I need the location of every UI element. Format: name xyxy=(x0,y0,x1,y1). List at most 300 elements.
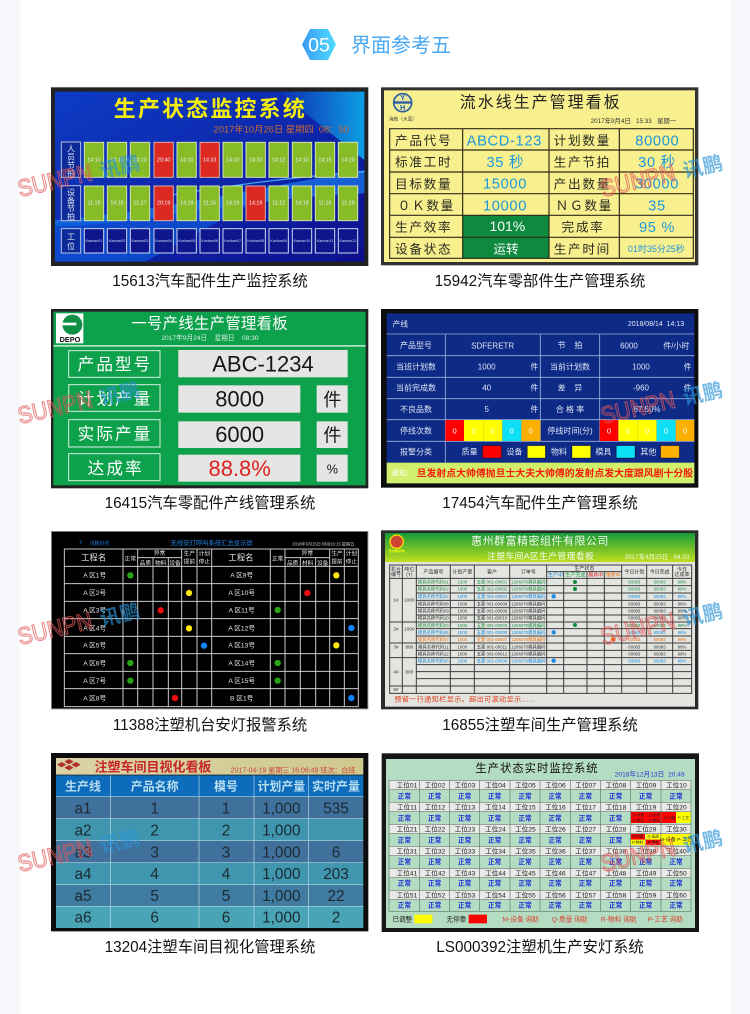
table headers: 正常 xyxy=(125,554,136,562)
table header: 今日计划 xyxy=(624,569,644,576)
table rows: 60083 xyxy=(628,630,641,635)
watermark: right column row 4: SUNPN xyxy=(598,833,678,877)
header xyxy=(78,537,354,547)
table text: 当前完成数 xyxy=(396,383,436,393)
panel: 16415 production line kanban: 6000 xyxy=(215,422,264,447)
table rows: 60083 xyxy=(628,623,641,628)
station states: 正常 xyxy=(428,857,442,866)
table rows: 98% xyxy=(678,630,686,635)
table text: 合 格 率 xyxy=(556,404,584,414)
table text: 1000 xyxy=(632,362,650,371)
panel: 13204 visual management board: 产品名称 xyxy=(131,779,179,794)
station states: 正常 xyxy=(579,900,592,909)
station names: 工位07 xyxy=(575,780,596,789)
station states: 正常 xyxy=(669,879,683,888)
panel: 15613 production monitoring screen: 14:10 xyxy=(180,158,193,164)
station names: 工位44 xyxy=(485,868,506,877)
station names: 工位34 xyxy=(485,846,506,855)
caption: 16415: 16415汽车零配件产线管理系统 xyxy=(105,495,315,512)
panel: 15613 production monitoring screen: 14:10 xyxy=(226,158,239,164)
table rows: 1000 xyxy=(458,601,468,606)
logo: SUNPN xyxy=(389,549,405,554)
panel: 15613 production monitoring screen: 拍 xyxy=(67,211,75,221)
station states: 正常 xyxy=(639,900,653,909)
table headers: 工程名 xyxy=(81,553,106,563)
station states: 正常 xyxy=(518,791,532,800)
station names: 工位13 xyxy=(455,802,476,811)
data table: 01时35分25秒 xyxy=(628,243,685,254)
date: 2018年12月13日 20:49 xyxy=(615,769,685,778)
logo xyxy=(389,535,405,554)
station states: 正常 xyxy=(428,879,442,888)
station states: 正常 xyxy=(398,813,411,822)
panel: 15613 production monitoring screen: Kanban11 xyxy=(317,239,333,243)
table rows: 1206070模具编码 xyxy=(511,622,546,629)
table rows: 60083 xyxy=(654,594,666,599)
station states: 正常 xyxy=(579,857,592,866)
data table: 生产时间 xyxy=(554,242,611,256)
table headers: 品质 xyxy=(140,559,151,567)
table header: 编号 xyxy=(391,571,401,578)
status colour cells: 0 xyxy=(664,426,668,435)
watermark: left column row 1: SUNPN xyxy=(15,158,95,202)
station states: 正常 xyxy=(518,857,532,866)
station names: 工位22 xyxy=(425,824,446,833)
legend xyxy=(392,914,683,923)
data table: 95 % xyxy=(639,220,675,236)
row names: A 区15号 xyxy=(228,677,255,685)
table text: 件 xyxy=(530,383,538,393)
station names: 工位17 xyxy=(575,802,596,811)
station states xyxy=(398,791,683,909)
station states: 正常 xyxy=(609,857,623,866)
panel: 13204 visual management board: 计划产量 xyxy=(257,779,305,794)
table rows: 60083 xyxy=(628,644,641,649)
panel: 13204 visual management board: 1,000 xyxy=(262,888,301,905)
watermark: right column row 3: 讯鹏 xyxy=(681,600,725,631)
watermark: left column row 3: 讯鹏 xyxy=(98,600,142,631)
station states: 正常 xyxy=(458,813,472,822)
station names: 工位16 xyxy=(545,802,566,811)
station names: 工位57 xyxy=(575,890,596,899)
station names: 工位27 xyxy=(575,824,596,833)
legend: M-设备 询助 xyxy=(503,914,539,923)
legend: R-物料 询助 xyxy=(601,914,637,923)
data table: 运转 xyxy=(493,242,519,256)
table text: 质量 xyxy=(462,447,478,457)
station names: 工位41 xyxy=(397,868,418,877)
panel: 13204 visual management board: 1,000 xyxy=(262,910,301,927)
panel: 13204 visual management board: a1 xyxy=(74,800,92,817)
panel: 16415 production line kanban: 88.8% xyxy=(208,456,271,481)
station states: 正常 xyxy=(488,835,502,844)
legend: 无停靠 xyxy=(446,914,467,923)
caption: 15613: 15613汽车配件生产监控系统 xyxy=(112,273,308,290)
panel: 15613 production monitoring screen: Kanban08 xyxy=(247,239,264,243)
table rows: 1000 xyxy=(458,623,468,628)
table rows: 五菱 001-00012 xyxy=(477,651,508,657)
table header: 模具中 xyxy=(588,572,603,579)
station names: 工位58 xyxy=(606,890,627,899)
data table: ０Ｋ数量 xyxy=(398,199,455,213)
panel: 15613 production monitoring screen: 员 xyxy=(67,153,75,162)
panel: 15613 production monitoring screen: 14:10 xyxy=(110,158,124,164)
panel: 13204 visual management board: a3 xyxy=(74,844,92,861)
panel: 15613 production monitoring screen: 14:13 xyxy=(133,158,147,164)
caption: 16855: 16855注塑车间生产管理系统 xyxy=(442,717,638,734)
table grid xyxy=(390,565,692,693)
table text: 报警分类 xyxy=(400,447,432,457)
panel: 16415 production line kanban: 达成率 xyxy=(88,459,144,478)
watermark: right column row 1: SUNPN xyxy=(598,158,678,202)
notice row: 预留一行通知栏显示。超出可滚动显示…… xyxy=(394,695,537,704)
station states: 正常 xyxy=(398,835,411,844)
data table: 80000 xyxy=(635,134,679,150)
panel: 15613 production monitoring screen: Kanban02 xyxy=(109,239,125,243)
alarm cells: P-工艺 xyxy=(678,815,689,820)
data table: 计划数量 xyxy=(554,134,611,148)
station names: 工位32 xyxy=(425,846,446,855)
station names: 工位28 xyxy=(606,824,627,833)
table text: 40 xyxy=(482,384,492,393)
panel: 15613 production monitoring screen: 14:19 xyxy=(295,201,309,207)
table rows: 60083 xyxy=(654,587,666,592)
panel: 15613 production monitoring screen: 14:12 xyxy=(272,158,285,164)
table header: (T) xyxy=(406,572,413,578)
logo xyxy=(57,759,81,770)
row names: A 区8号 xyxy=(83,694,106,702)
table headers: 生产 xyxy=(331,550,343,558)
table text: 件 xyxy=(684,383,692,393)
status dots xyxy=(551,580,615,663)
table header: 今日 xyxy=(677,566,687,573)
station names: 工位10 xyxy=(666,780,687,789)
station states: 正常 xyxy=(548,879,562,888)
station states: 正常 xyxy=(609,879,623,888)
table header: 今日完成 xyxy=(650,569,670,576)
table headers: 物料 xyxy=(155,559,167,567)
station states: 正常 xyxy=(488,791,502,800)
panel: 15613 production monitoring screen: 14:10 xyxy=(87,158,101,164)
station states: 正常 xyxy=(428,835,442,844)
station states: 正常 xyxy=(458,857,472,866)
table rows: 1000 xyxy=(458,644,468,649)
table headers: 品质 xyxy=(287,559,299,567)
table header xyxy=(391,565,689,579)
logo: DEPO xyxy=(56,313,83,344)
panel title: 生产状态实时监控系统 xyxy=(475,761,599,775)
watermark: left column row 1 xyxy=(15,148,142,202)
data table: 30000 xyxy=(635,176,679,192)
panel: 13204 visual management board: 203 xyxy=(323,866,349,883)
station states: 正常 xyxy=(579,791,592,800)
table rows: 98% xyxy=(678,587,686,592)
panel: 13204 visual management board: 5 xyxy=(150,888,159,905)
table rows: 60083 xyxy=(654,637,666,642)
row labels xyxy=(61,142,81,253)
caption: 15942: 15942汽车零部件生产管理系统 xyxy=(435,273,645,290)
panel: 15613 production monitoring screen: 14:10 xyxy=(341,158,355,164)
station names: 工位59 xyxy=(636,890,657,899)
panel: 15613 production monitoring screen: 11:19 xyxy=(342,201,354,207)
station names: 工位50 xyxy=(666,868,687,877)
station names: 工位38 xyxy=(606,846,627,855)
panel: 13204 visual management board: 1,000 xyxy=(262,822,301,839)
panel: 15613 production monitoring screen: 14:10 xyxy=(295,158,309,164)
alarm cells: Q-品质 xyxy=(648,834,659,839)
icon: hexagon number 05 xyxy=(302,29,336,60)
watermark: right column row 3 xyxy=(598,596,725,650)
table text: 当前计划数 xyxy=(550,361,590,371)
table text: 差 异 xyxy=(558,383,582,393)
station names: 工位36 xyxy=(545,846,566,855)
station states: 正常 xyxy=(458,791,472,800)
alarm cells: M-设备 xyxy=(633,812,644,817)
row names: A 区12号 xyxy=(228,624,255,632)
table rows: 模具名称代码04 xyxy=(418,593,449,600)
panel: 15613 production monitoring screen: Kanban04 xyxy=(155,239,172,243)
table headers: 正常 xyxy=(272,554,284,562)
table headers xyxy=(81,549,357,567)
station states: 正常 xyxy=(609,835,623,844)
station states: 正常 xyxy=(428,813,442,822)
table rows: 1206070模具编码 xyxy=(511,593,546,600)
date: 2017年9月24日 星期日 08:30 xyxy=(161,333,259,342)
status dots xyxy=(127,572,354,701)
table rows: 98% xyxy=(678,609,686,614)
table rows: 模具名称代码06 xyxy=(418,658,449,665)
station names: 工位26 xyxy=(545,824,566,833)
station names: 工位56 xyxy=(545,890,566,899)
station states: 正常 xyxy=(639,879,653,888)
table header: 机台 xyxy=(391,566,401,573)
station states: 正常 xyxy=(518,835,532,844)
table text: 件 xyxy=(530,361,538,371)
table headers: 异常 xyxy=(154,549,166,557)
panel: 15613 production monitoring screen: 11:12 xyxy=(272,201,285,207)
row names: B 区1号 xyxy=(230,694,254,702)
station names: 工位48 xyxy=(606,868,627,877)
station names: 工位02 xyxy=(425,780,446,789)
panel: 16415 production line kanban: 件 xyxy=(323,390,341,410)
row names: A 区10号 xyxy=(228,589,255,597)
table rows: 模具名称代码09 xyxy=(418,608,449,615)
station names: 工位20 xyxy=(666,802,687,811)
alarm cells: R-物料 xyxy=(632,839,644,844)
machine column xyxy=(393,598,415,692)
status colour cells: 0 xyxy=(510,426,514,435)
field labels xyxy=(69,351,160,481)
caption: 11388: 11388注塑机台安灯报警系统 xyxy=(113,717,307,734)
station states: 正常 xyxy=(609,900,623,909)
watermark: left column row 2: SUNPN xyxy=(15,385,95,429)
station states: 正常 xyxy=(488,879,502,888)
legend: P-工艺 询助 xyxy=(648,914,683,923)
watermark: right column row 4 xyxy=(598,823,725,877)
station states: 正常 xyxy=(669,900,683,909)
watermark: left column row 4: SUNPN xyxy=(15,833,95,877)
watermark: left column row 4: 讯鹏 xyxy=(98,827,142,858)
section heading: 05 界面参考五 xyxy=(302,29,451,60)
panel: 13204 visual management board: 3 xyxy=(150,844,159,861)
table text: 件/小时 xyxy=(663,340,689,350)
caption: 17454: 17454汽车配件生产管理系统 xyxy=(442,495,638,512)
watermark: right column row 2 xyxy=(598,375,725,429)
station names: 工位08 xyxy=(606,780,627,789)
station names: 工位33 xyxy=(455,846,476,855)
station states: 正常 xyxy=(398,879,411,888)
data table: 目标数量 xyxy=(395,177,452,191)
panel: 15613 production monitoring screen xyxy=(51,87,368,266)
row names: A 区11号 xyxy=(229,607,255,615)
data table: 产出数量 xyxy=(554,177,611,191)
station names: 工位39 xyxy=(636,846,657,855)
station names: 工位31 xyxy=(397,846,418,855)
panel: 13204 visual management board: 生产线 xyxy=(65,779,101,794)
machine column: 2# xyxy=(393,627,399,632)
panel: 11388 andon alarm screen xyxy=(51,531,368,709)
panel: 15613 production monitoring screen: Kanban03 xyxy=(132,239,148,243)
panel: 16415 production line kanban: ABC-1234 xyxy=(212,352,314,377)
table text: 其他 xyxy=(640,447,656,457)
machine column: 1# xyxy=(393,598,399,603)
watermark: right column row 2: SUNPN xyxy=(598,385,678,429)
table header: 客户 xyxy=(487,569,497,576)
station states: 正常 xyxy=(548,791,562,800)
station states: 正常 xyxy=(639,857,653,866)
station states: 正常 xyxy=(548,835,562,844)
panel title: 生产状态监控系统 xyxy=(114,96,307,121)
table rows: 60083 xyxy=(628,652,641,657)
panel: 13204 visual management board: 6 xyxy=(150,910,159,927)
panel: 15613 production monitoring screen: 11:16 xyxy=(319,201,331,207)
table rows: 1000 xyxy=(458,659,468,664)
station names: 工位42 xyxy=(425,868,446,877)
panel: 15613 production monitoring screen: 14:15 xyxy=(318,158,332,164)
panel: 15613 production monitoring screen: 14:33 xyxy=(203,158,216,164)
table rows: 1206070模具编码 xyxy=(511,615,546,622)
machine column: 1000 xyxy=(404,627,415,632)
table rows: 1206070模具编码 xyxy=(511,651,546,658)
panel: 13204 visual management board: 2 xyxy=(332,910,340,927)
station states: 正常 xyxy=(398,791,411,800)
sub title: 注塑车间A区生产管理看板 xyxy=(487,550,594,561)
data table: 产品代号 xyxy=(395,134,452,148)
station names: 工位21 xyxy=(397,824,418,833)
station names: 工位23 xyxy=(455,824,476,833)
table rows: 60083 xyxy=(654,623,666,628)
table rows: 60083 xyxy=(628,637,641,642)
panel: 16415 production line kanban: 8000 xyxy=(215,387,264,412)
table rows: 60083 xyxy=(654,580,666,585)
panel: 15613 production monitoring screen: 人 xyxy=(67,144,75,153)
panel: 16415 production line kanban xyxy=(51,309,368,488)
station names: 工位55 xyxy=(515,890,536,899)
station states: 正常 xyxy=(458,879,472,888)
machine column: 800 xyxy=(405,670,414,675)
panel: 15613 production monitoring screen: Kanban12 xyxy=(340,239,356,243)
panel: 16415 production line kanban: 实际产量 xyxy=(78,424,152,443)
table text: 不良品数 xyxy=(400,404,432,414)
watermark: left column row 2: 讯鹏 xyxy=(98,379,142,410)
station names: 工位15 xyxy=(515,802,536,811)
table grid xyxy=(64,549,358,707)
station names: 工位53 xyxy=(455,890,476,899)
header xyxy=(393,319,684,329)
machine column: 800 xyxy=(405,644,414,649)
station states: 正常 xyxy=(518,813,532,822)
data table: 设备状态 xyxy=(395,242,452,256)
station names: 工位60 xyxy=(666,890,687,899)
station states: 正常 xyxy=(669,857,683,866)
panel: 16415 production line kanban: 计划产量 xyxy=(78,389,152,408)
table header: 生产状态 xyxy=(574,565,594,572)
table header: 产品编号 xyxy=(423,569,443,576)
table text: -960 xyxy=(633,384,650,393)
panel: 13204 visual management board: a6 xyxy=(74,910,92,927)
machine column: 3# xyxy=(393,644,399,649)
row names: A 区6号 xyxy=(83,659,106,667)
alarm cells: M-设备 xyxy=(632,834,644,839)
table rows: 模具名称代码05 xyxy=(418,629,449,636)
table rows: 1206070模具编码 xyxy=(511,636,546,643)
station states: 正常 xyxy=(579,879,592,888)
panel title: 注塑车间目视化看板 xyxy=(95,760,211,775)
table rows: 五菱 001-00003 xyxy=(477,622,508,628)
station states: 正常 xyxy=(548,857,562,866)
panel: 13204 visual management board xyxy=(51,753,368,931)
table rows: 60083 xyxy=(654,652,666,657)
station names: 工位46 xyxy=(545,868,566,877)
table header: 计划产量 xyxy=(452,569,472,576)
table headers: 异常 xyxy=(302,549,313,557)
panel: 15613 production monitoring screen: 11:15 xyxy=(203,201,216,207)
logo xyxy=(389,93,417,122)
table rows: 1206070模具编码 xyxy=(511,658,546,665)
panel: 15613 production monitoring screen: 备 xyxy=(67,195,75,205)
alarm legend xyxy=(482,445,680,458)
status colour cells: 0 xyxy=(491,426,495,435)
table rows: 60083 xyxy=(654,659,666,664)
table rows: 模具名称代码12 xyxy=(418,651,449,658)
station states: 正常 xyxy=(398,857,411,866)
panel: 13204 visual management board: 1 xyxy=(222,800,230,817)
table text: 停线次数 xyxy=(400,425,432,435)
table headers: 计划 xyxy=(346,550,357,558)
table rows: 五菱 001-00005 xyxy=(477,629,508,635)
station names: 工位47 xyxy=(575,868,596,877)
table text: SDFERETR xyxy=(471,341,514,350)
station names: 工位09 xyxy=(636,780,657,789)
alarm cells: M-设备 P-工艺 xyxy=(660,836,692,843)
table rows: 模具名称代码02 xyxy=(418,586,449,593)
table rows: 1206070模具编码 xyxy=(511,579,546,586)
watermark: left column row 4 xyxy=(15,823,142,877)
table rows: 1000 xyxy=(458,630,468,635)
station names: 工位04 xyxy=(485,780,506,789)
table rows: 60083 xyxy=(654,630,666,635)
panel title: 流水线生产管理看板 xyxy=(460,94,622,112)
table rows: 98% xyxy=(678,580,686,585)
panel: 15613 production monitoring screen: 拍 xyxy=(67,168,75,178)
table text xyxy=(396,340,692,457)
table rows: 1000 xyxy=(458,616,468,621)
table headers: 生产 xyxy=(184,550,195,558)
station states: 正常 xyxy=(548,900,562,909)
table headers: 材料 xyxy=(302,559,314,567)
panel: 15613 production monitoring screen: 14:19 xyxy=(249,201,262,207)
panel: 16855 workshop production management xyxy=(381,530,698,709)
